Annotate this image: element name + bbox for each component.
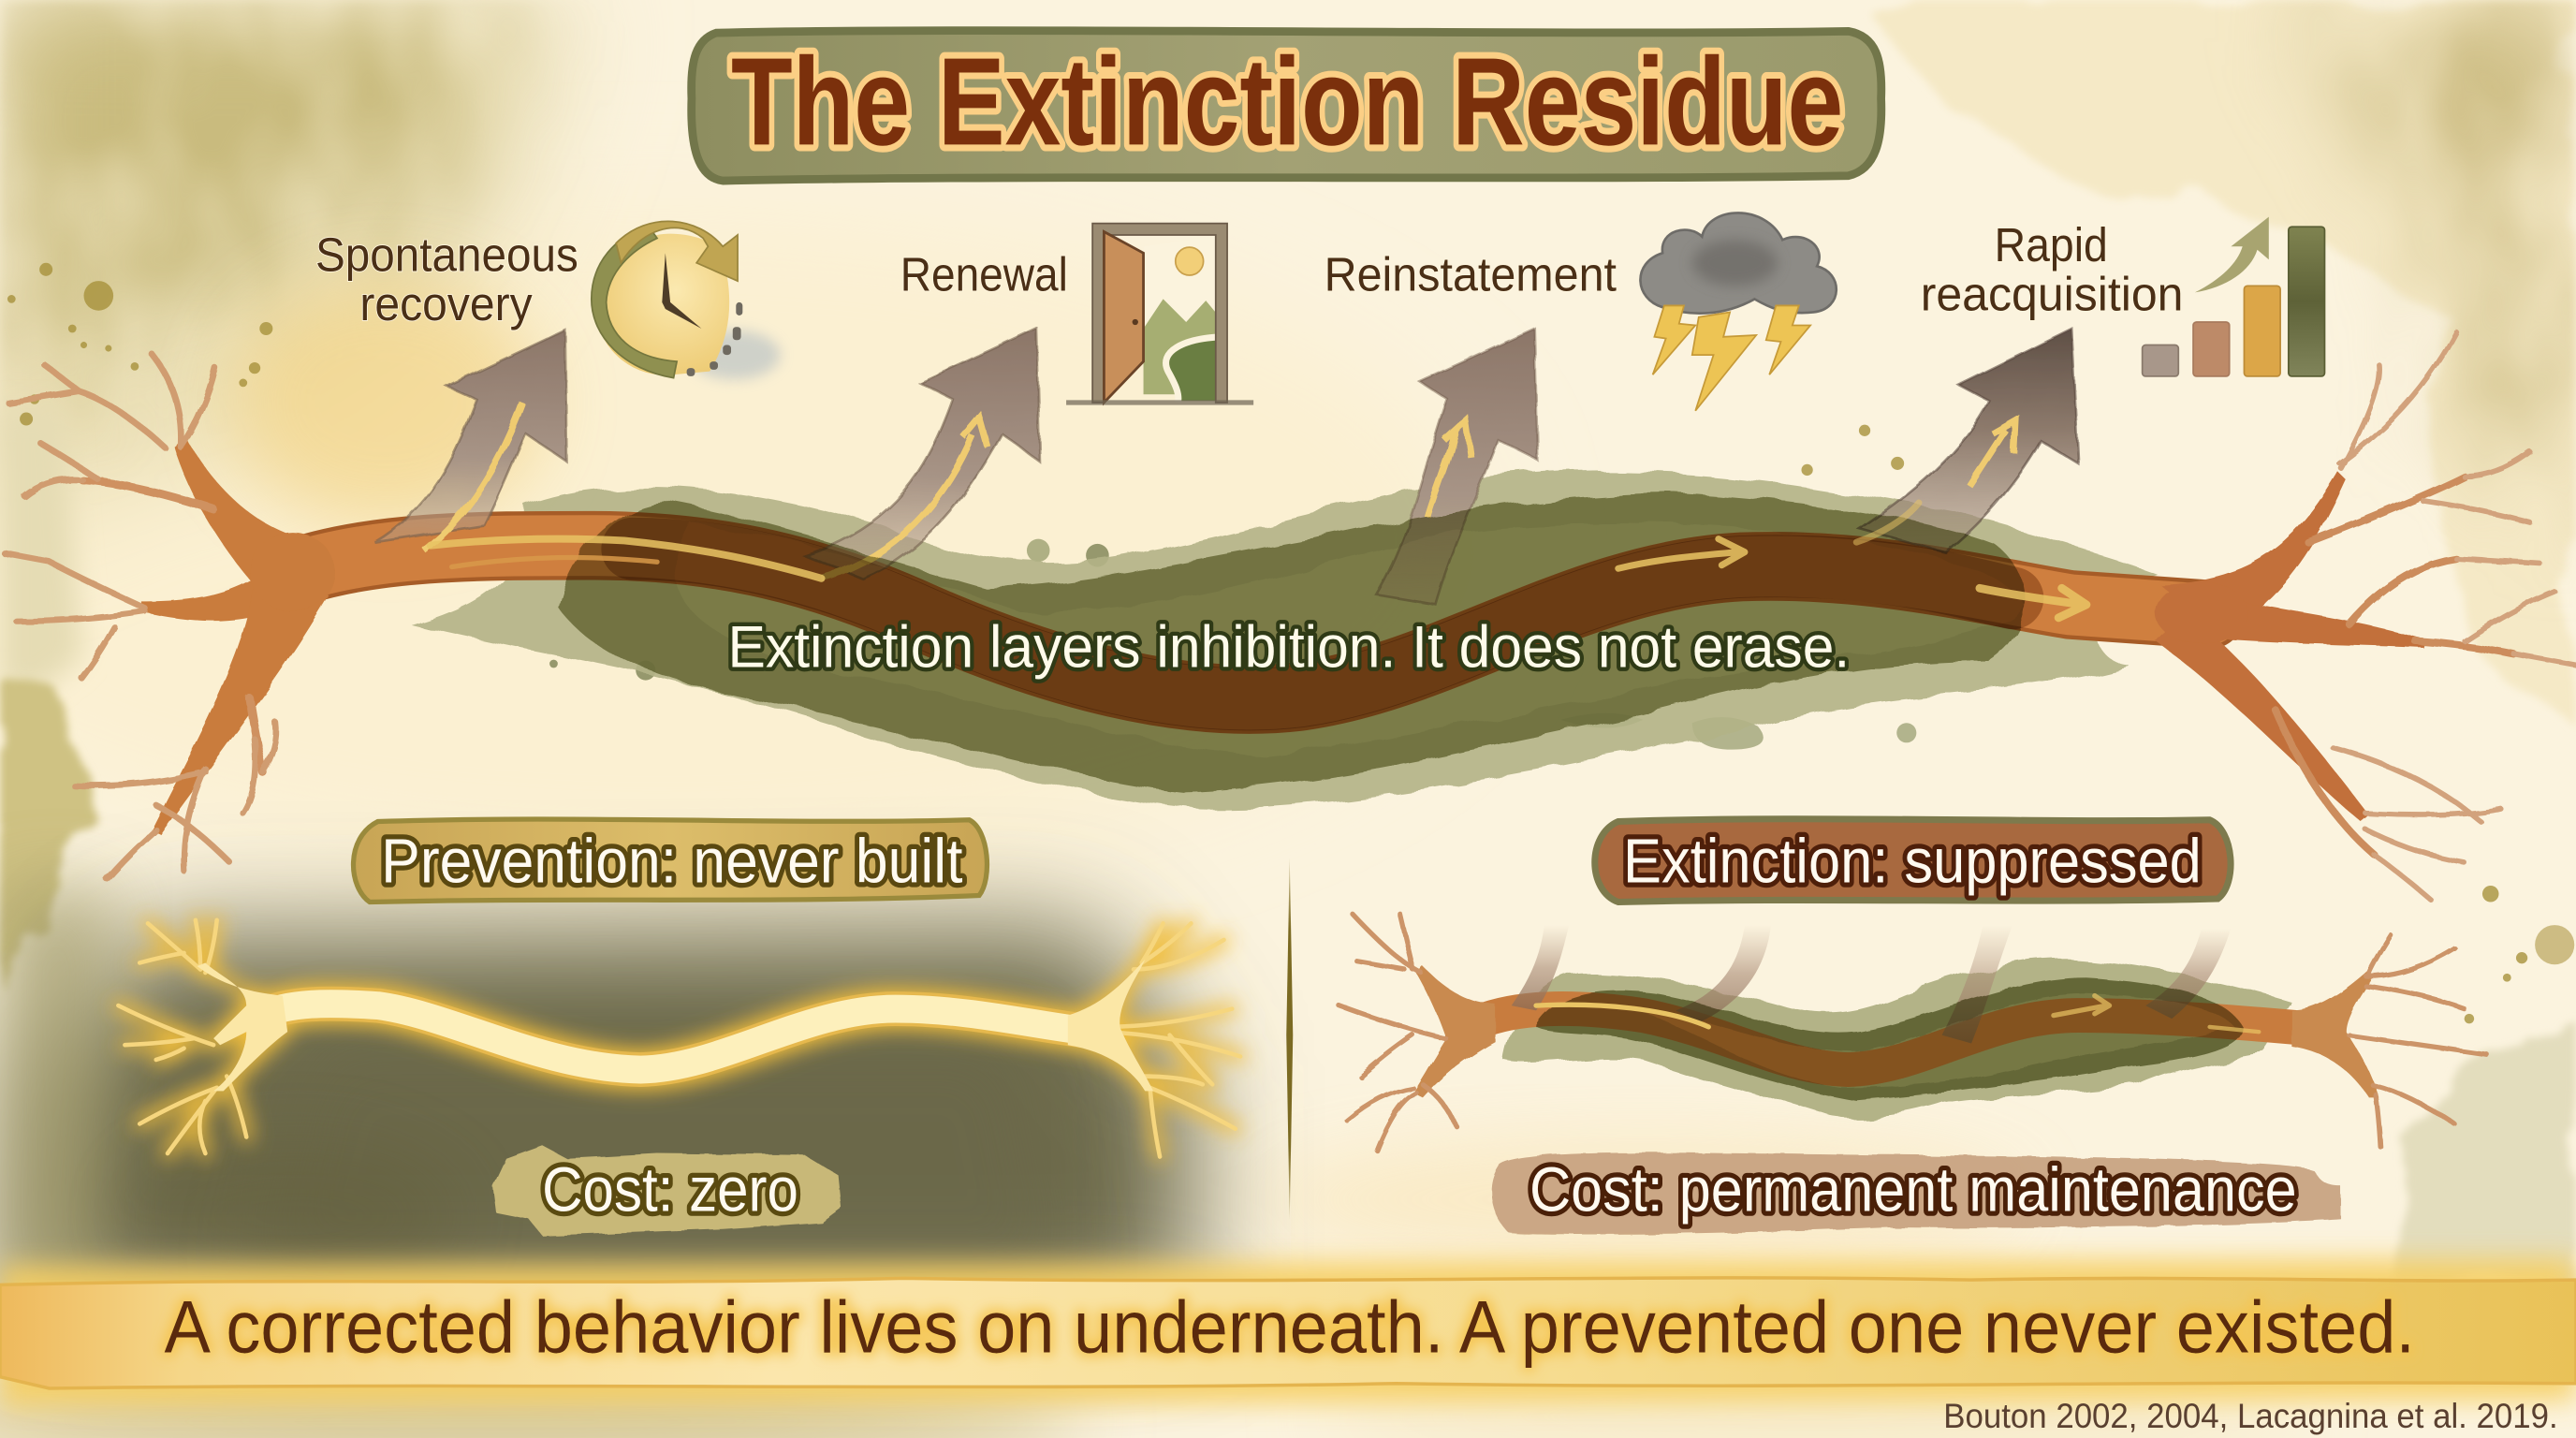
pill: prevention never built: Prevention: never built [381, 827, 963, 896]
mini energy marks [1536, 996, 2259, 1032]
pill: extinction suppressed: Extinction: suppressed [1623, 827, 2202, 896]
label: rapid reacquisition: reacquisition [1921, 268, 2184, 321]
closing message: A corrected behavior lives on underneath. A prevented one never existed. [165, 1285, 2415, 1368]
icon: clock with dust [592, 221, 781, 379]
main neuron: axon [287, 546, 2210, 699]
arrow: spontaneous recovery [374, 330, 567, 550]
cost zero tag: Cost: zero [542, 1155, 798, 1225]
cost permanent maintenance tag: Cost: permanent maintenance [1530, 1155, 2297, 1225]
mini dark layers [1536, 977, 2243, 1101]
icon: storm cloud [1640, 213, 1837, 411]
citation: Bouton 2002, 2004, Lacagnina et al. 2019. [1943, 1397, 2558, 1435]
mini axon [1479, 1008, 2308, 1070]
axon energy marks [431, 503, 2086, 618]
spatter dots [7, 263, 2574, 1023]
main neuron: left dendrites [5, 353, 335, 879]
title banner [692, 31, 1881, 181]
divider [1286, 858, 1293, 1219]
label: spontaneous recovery [315, 228, 578, 330]
label: rapid reacquisition: Rapid [1995, 218, 2108, 271]
label: reinstatement: Reinstatement [1325, 248, 1617, 301]
mini dendrites [1339, 914, 2487, 1151]
center message: Extinction layers inhibition. It does not erase. [728, 615, 1850, 681]
closing banner [0, 1258, 2576, 1406]
label: rapid reacquisition [1921, 218, 2184, 321]
arrow: rapid reacquisition [1860, 329, 2078, 552]
mini faded arrows [1512, 925, 2231, 1043]
cost zero tag [493, 1145, 842, 1236]
panel: prevention dark background [0, 888, 1191, 1314]
main neuron background layer: outer inhibition wash [411, 471, 2156, 809]
main neuron: right dendrites [2156, 332, 2576, 901]
title: The Extinction Residue [731, 32, 1843, 171]
label: spontaneous recovery: recovery [359, 277, 533, 330]
prevention glowing neuron [118, 920, 1240, 1157]
relapse arrows [374, 329, 2078, 605]
mini inhibition wash [1503, 960, 2291, 1119]
axon darkening inside layers [633, 549, 2012, 699]
icon: open door [1066, 224, 1253, 403]
extinction mini neuron [1339, 914, 2487, 1151]
arrow: reinstatement [1377, 329, 1538, 605]
inhibition layers over axon [559, 493, 2025, 792]
label: renewal: Renewal [900, 248, 1068, 301]
label: spontaneous recovery: Spontaneous [315, 228, 578, 282]
arrow: renewal [805, 329, 1040, 579]
icon: rising bars [2143, 217, 2324, 376]
